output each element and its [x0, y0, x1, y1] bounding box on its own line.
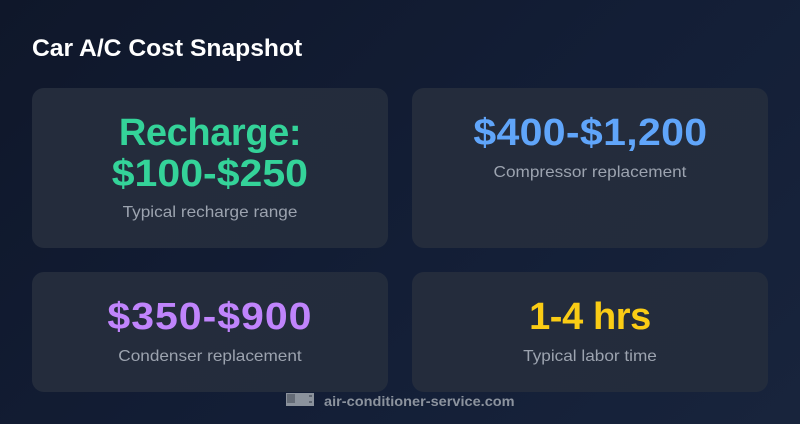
- panel: recharge: [32, 88, 388, 248]
- icon: air conditioner: [286, 393, 314, 406]
- labor label: Typical labor time: [523, 348, 657, 365]
- footer source: air-conditioner-service.com: [324, 393, 515, 409]
- title: Car A/C Cost Snapshot: [32, 35, 302, 62]
- recharge value: $100-$250: [112, 153, 308, 195]
- condenser label: Condenser replacement: [118, 348, 302, 365]
- recharge value: Recharge:: [119, 112, 301, 154]
- compressor label: Compressor replacement: [494, 164, 686, 181]
- labor value: 1-4 hrs: [529, 296, 651, 338]
- panel: compressor: [412, 88, 768, 248]
- recharge value: [112, 112, 308, 195]
- recharge label: Typical recharge range: [123, 204, 297, 221]
- panel: condenser: [32, 272, 388, 392]
- panel: labor: [412, 272, 768, 392]
- compressor value: $400-$1,200: [473, 112, 707, 154]
- condenser value: $350-$900: [107, 296, 312, 338]
